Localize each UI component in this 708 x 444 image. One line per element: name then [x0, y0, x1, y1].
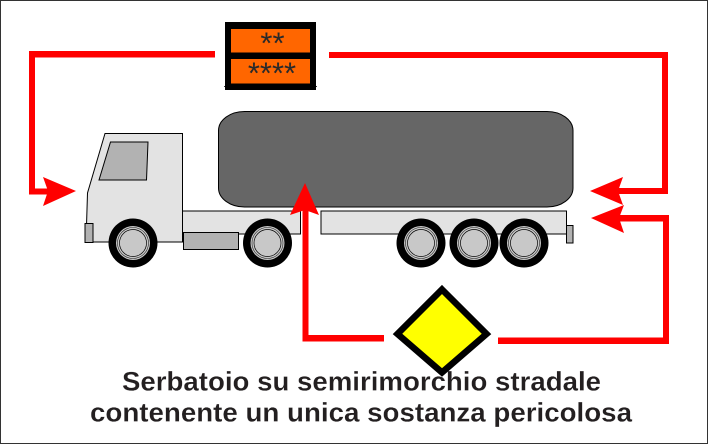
wheel 2 [243, 218, 292, 268]
side box [184, 232, 238, 250]
arrow: diamond to rear [498, 205, 669, 344]
yellow diamond placard [398, 290, 486, 372]
orange hazard plate [224, 22, 317, 90]
arrow: plate to rear [329, 52, 668, 205]
orange hazard plate: **** [248, 56, 296, 90]
tank [218, 112, 573, 207]
wheel 5 [500, 218, 548, 268]
trailer chassis [321, 211, 566, 234]
arrow: diamond to tank [290, 183, 384, 342]
orange hazard plate: ** [260, 26, 285, 60]
wheel 3 [396, 218, 446, 268]
caption: Serbatoio su semirimorchio stradale [122, 366, 601, 396]
front bumper [85, 224, 93, 242]
caption: contenente un unica sostanza pericolosa [90, 398, 633, 428]
wheel 1 [108, 218, 158, 268]
arrow: plate to cab [29, 51, 215, 206]
tractor chassis [182, 211, 300, 234]
wheel 4 [450, 218, 498, 268]
truck [85, 134, 573, 250]
cab window [99, 142, 148, 180]
caption [90, 366, 633, 428]
cab [86, 134, 182, 242]
rear light [566, 226, 573, 243]
